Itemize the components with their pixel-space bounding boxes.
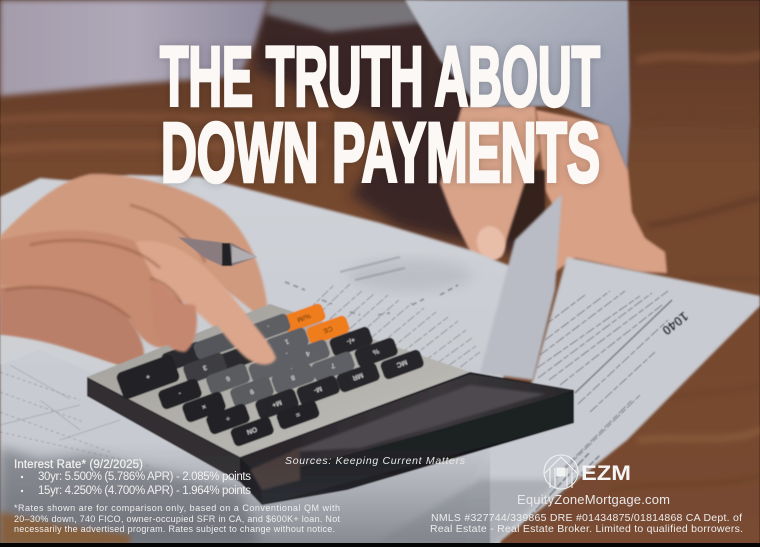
rate disclaimer: *Rates shown are for comparison only, based on a Conventional QM with [14, 503, 340, 513]
calculator keys: 4 [305, 349, 311, 357]
1040 label: 1040 [659, 309, 691, 338]
licensing text: NMLS #327744/339865 DRE #01434875/01814868 CA Dept. of [431, 512, 742, 524]
bottom black strip [0, 543, 760, 547]
title [160, 30, 600, 200]
calculator keys: 9 [249, 387, 255, 395]
pen [178, 237, 257, 266]
calculator keys: 7 [330, 361, 336, 369]
calculator keys [115, 302, 425, 448]
calculator keys: M- [312, 384, 323, 394]
calculator keys: M+ [271, 398, 283, 408]
shirt left [0, 0, 268, 96]
calculator keys: + [145, 372, 151, 380]
calculator keys: % [371, 347, 380, 356]
calculator keys: - [177, 389, 182, 397]
icon: house in circle [544, 455, 578, 489]
15 year rate row: 15yr: 4.250% (4.700% APR) - 1.964% points [38, 485, 251, 497]
rate disclaimer: 20–30% down, 740 FICO, owner-occupied SFR in CA, and $600K+ loan. Not [14, 514, 340, 524]
curled sheet [480, 194, 562, 380]
calculator [87, 290, 574, 505]
fingers over keys [155, 290, 276, 365]
calculator keys: 1 [284, 337, 290, 345]
right sleeve [405, 0, 630, 170]
30 year rate row: 30yr: 5.500% (5.786% APR) - 2.085% points [38, 471, 251, 483]
1040 tax form [465, 257, 760, 547]
calculator keys: MR [351, 371, 364, 381]
sources note: Sources: Keeping Current Matters [285, 455, 466, 467]
calculator keys: . [266, 323, 271, 331]
right hand [440, 106, 667, 274]
interest rate block [14, 459, 251, 497]
calculator keys: CE [322, 324, 333, 334]
calculator keys: ON [246, 425, 258, 435]
rate disclaimer [14, 503, 340, 534]
form text rows [522, 291, 672, 525]
dark area behind hands [255, 12, 530, 255]
calculator keys: 8 [290, 373, 296, 381]
calculator keys: = [295, 410, 301, 418]
calculator keys: × [201, 402, 207, 410]
website: EquityZoneMortgage.com [517, 492, 670, 507]
rate disclaimer: necessarily the advertised program. Rates subject to change without notice. [14, 524, 335, 534]
calculator keys: +/- [345, 335, 356, 345]
wordmark: EZM [581, 462, 631, 485]
left hand [0, 174, 276, 372]
licensing text: Real Estate - Real Estate Broker. Limited to qualified borrowers. [430, 523, 743, 535]
interest rate heading: Interest Rate* (9/2/2025) [14, 459, 143, 471]
calculator keys: MC [395, 358, 408, 368]
calculator keys: 6 [225, 374, 231, 382]
form line rows on main paper [0, 257, 480, 466]
licensing text [430, 512, 743, 535]
bottom fade [0, 445, 490, 545]
calculator keys: 3 [202, 363, 208, 371]
main paper [0, 175, 520, 547]
calculator keys: %/M [296, 311, 311, 323]
calculator keys: ÷ [225, 414, 231, 422]
logo: EZM [544, 455, 631, 489]
